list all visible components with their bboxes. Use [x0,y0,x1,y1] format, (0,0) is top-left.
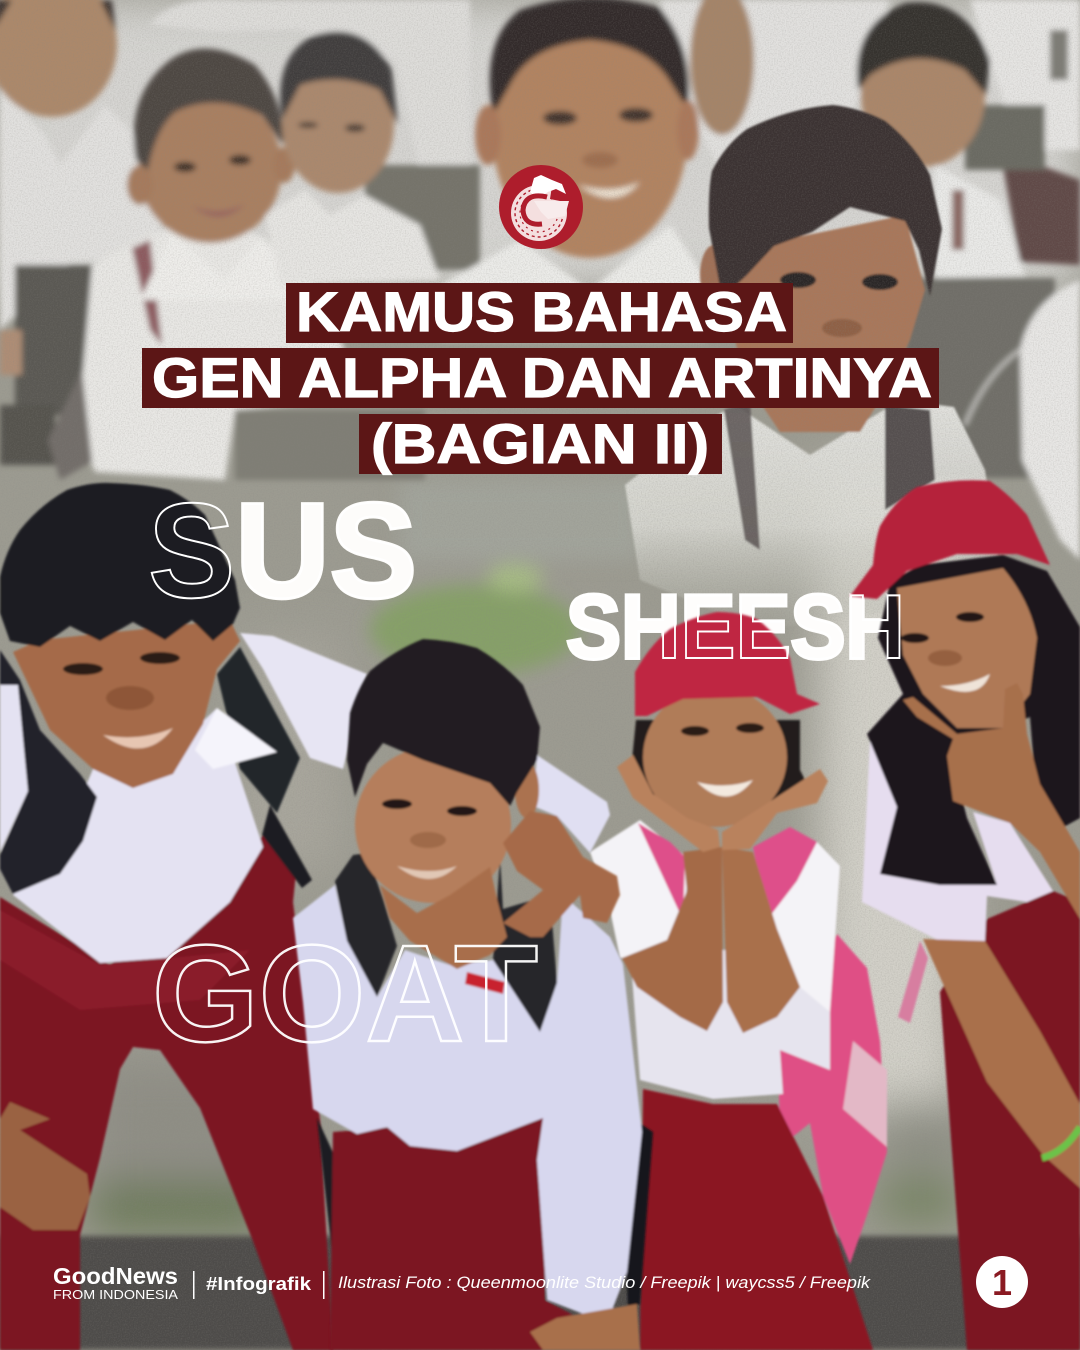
hair [867,555,1080,885]
red cap [635,612,820,716]
shirt [13,708,263,963]
sleeve [0,685,28,852]
student: right girl with long hair and red cap [850,480,1080,1350]
shirt [862,734,1053,941]
upper sleeve [240,633,367,769]
pink straps [638,823,817,920]
footer divider [193,1271,194,1299]
trousers [330,1115,620,1350]
arms [622,847,723,1031]
student: left boy with backpack [0,483,367,1350]
SUS outline lettering: SUS [148,475,417,626]
backpack straps [0,650,97,894]
student: far left [0,0,165,330]
hair [0,483,240,647]
mesh pocket [843,1041,887,1147]
student: girl in red cap with pink backpack [590,612,887,1350]
footer divider [323,1271,324,1299]
GOAT outline lettering: GOAT [152,917,538,1071]
arm sleeve around girl [533,755,610,853]
cap [850,480,1050,599]
hand at lower left [0,1102,90,1230]
title line 1: KAMUS BAHASA [296,280,787,343]
logo: GoodNews garuda badge [499,165,583,249]
face [897,568,1037,728]
student: centre boy leaning forward [293,639,653,1350]
trousers [940,891,1080,1350]
backpack straps [335,853,397,997]
hand under chin [380,867,507,969]
photo credit: Ilustrasi Foto : Queenmoonlite Studio / Freepik | waycss5 / Freepik [338,1274,871,1292]
pink backpack [778,934,887,1264]
student: second boy with backpack [0,49,425,480]
thin backpack strap [262,805,312,888]
trousers [0,836,333,1350]
sleeves [590,820,840,1012]
strap [898,941,928,1023]
hand and arm [903,683,1080,919]
black backpack strip [620,1110,653,1309]
hands [617,755,720,852]
SHEESH outline lettering: SHEESH [566,577,905,678]
foreground-back student with side-part hair [625,105,1000,630]
student: central smiling boy [440,0,710,340]
lower shirt [630,950,830,1099]
hair [630,720,815,810]
hair [347,639,540,806]
collar [195,708,277,769]
background row of blurred students [0,0,1080,560]
green bracelet [1042,1127,1080,1158]
student: far right boy [857,2,1080,278]
face [355,747,511,903]
shirt [293,885,642,1323]
hand on shoulder [503,811,620,937]
hand at bottom [530,1304,640,1350]
footer brand: GoodNews from Indonesia: GoodNews [53,1263,178,1289]
footer hashtag: #Infografik [206,1274,312,1294]
skirt [640,1089,873,1350]
student: right edge figure [905,278,1080,560]
title block [142,280,939,475]
page number badge [976,1256,1028,1308]
page number badge: 1 [992,1262,1012,1303]
footer brand: GoodNews from Indonesia: FROM INDONESIA [53,1288,179,1302]
face [13,620,240,788]
SHEESH filled lettering behind subjects: SHEESH [566,577,905,678]
face [643,687,787,827]
footer brand: GoodNews from Indonesia [53,1263,179,1302]
lower arm [923,939,1080,1188]
student: third boy [265,32,440,285]
title line 3: (BAGIAN II) [371,412,709,475]
student: small back figures [150,0,1080,270]
title line 2: GEN ALPHA DAN ARTINYA [152,346,932,409]
